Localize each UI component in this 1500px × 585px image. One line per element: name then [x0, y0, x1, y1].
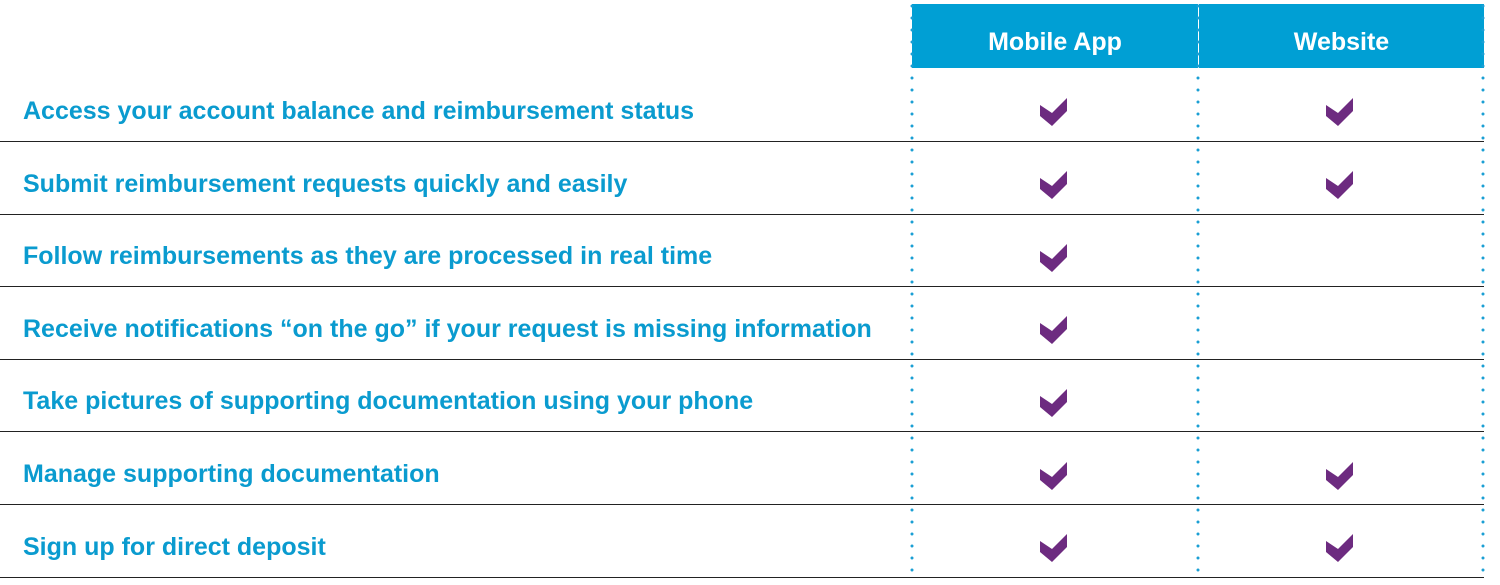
- row 1: [0, 69, 1484, 142]
- row 6: [0, 432, 1484, 505]
- row 7: [0, 505, 1484, 578]
- row 5: [0, 359, 1484, 432]
- row 5: Take pictures of supporting documentation using your phone: [23, 386, 753, 414]
- header: Website: [1199, 4, 1484, 68]
- header: Website: Website: [1294, 28, 1389, 56]
- row 4: Receive notifications “on the go” if your request is missing information: [23, 314, 872, 342]
- row 4: [0, 287, 1484, 360]
- row 3: Follow reimbursements as they are processed in real time: [23, 242, 712, 270]
- row 1: Access your account balance and reimbursement status: [23, 96, 694, 124]
- header: Mobile App: [912, 4, 1198, 68]
- header: Mobile App: Mobile App: [988, 28, 1122, 56]
- row 6: Manage supporting documentation: [23, 460, 440, 488]
- row 2: Submit reimbursement requests quickly and easily: [23, 170, 627, 198]
- row 7: Sign up for direct deposit: [23, 532, 326, 560]
- row 3: [0, 214, 1484, 287]
- row 2: [0, 142, 1484, 215]
